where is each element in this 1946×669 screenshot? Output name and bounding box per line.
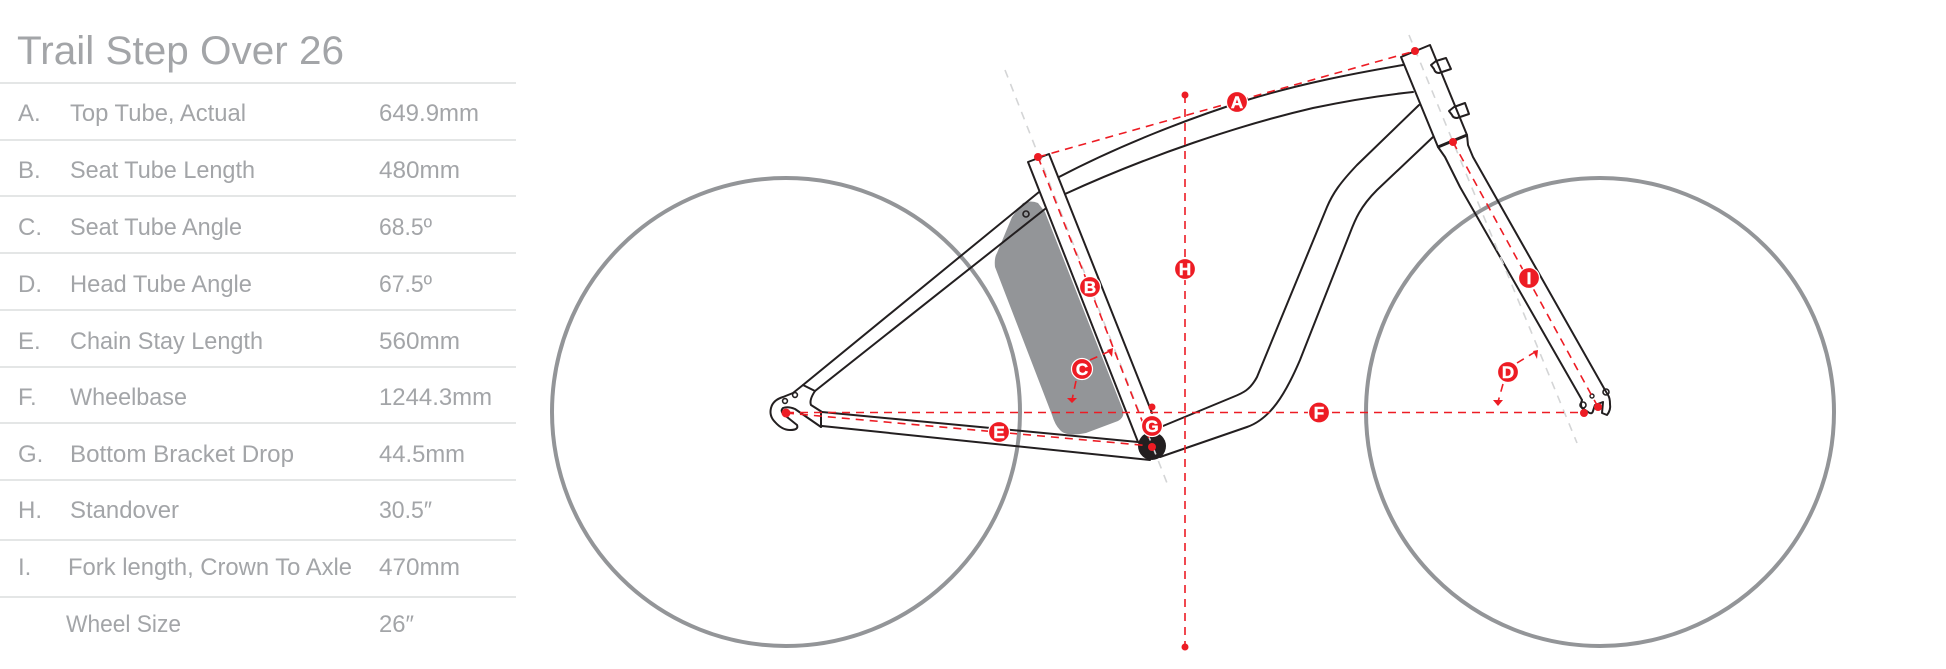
top tube — [1059, 65, 1413, 194]
dropout holes — [783, 393, 797, 403]
row I: Fork length, Crown To Axle — [68, 554, 352, 581]
row E: 560mm — [379, 328, 460, 355]
fork — [1438, 135, 1605, 400]
chain stays — [821, 412, 1150, 460]
row A: A. — [18, 100, 41, 127]
dimension A: top tube: A — [1231, 93, 1243, 112]
head tube lower cup — [1438, 135, 1467, 147]
row C: C. — [18, 214, 42, 241]
fork dropout — [1581, 390, 1610, 415]
head tube — [1401, 45, 1467, 147]
row B: Seat Tube Length — [70, 157, 255, 184]
row C: 68.5º — [379, 214, 432, 241]
row B: B. — [18, 157, 41, 184]
dimension B: seat tube length — [1038, 157, 1152, 446]
dimension G: bottom bracket drop: G — [1145, 417, 1159, 436]
panel: geometry table — [0, 29, 516, 638]
cable clip lower — [1449, 103, 1469, 118]
axle marks — [782, 408, 1588, 418]
front wheel — [1366, 178, 1834, 646]
row E: E. — [18, 328, 41, 355]
row G: 44.5mm — [379, 441, 465, 468]
head tube axis — [1409, 35, 1577, 443]
row H — [18, 497, 432, 524]
row wheel size: 26″ — [379, 611, 414, 638]
row D: D. — [18, 271, 42, 298]
dimension A: top tube — [1034, 47, 1419, 161]
row G: G. — [18, 441, 43, 468]
row E: Chain Stay Length — [70, 328, 263, 355]
title: Trail Step Over 26 — [17, 29, 344, 73]
battery mount hole — [1023, 211, 1029, 217]
row D — [18, 271, 432, 298]
seat tube — [1028, 154, 1152, 442]
dimension H: standover — [1174, 92, 1196, 650]
row H: H. — [18, 497, 42, 524]
dimension C: seat tube angle: C — [1076, 360, 1088, 379]
row F: F. — [18, 384, 37, 411]
row G — [18, 441, 465, 468]
bottom bracket — [1138, 432, 1166, 460]
battery — [995, 202, 1123, 434]
dimension B: seat tube length: B — [1084, 278, 1096, 297]
row G: Bottom Bracket Drop — [70, 441, 294, 468]
row I: 470mm — [379, 554, 460, 581]
dimension F: wheelbase — [786, 402, 1584, 423]
row wheel size: Wheel Size — [66, 611, 181, 638]
row I — [18, 554, 460, 581]
row F — [18, 384, 492, 411]
seat stays — [803, 192, 1045, 391]
rear wheel — [552, 178, 1020, 646]
row F: 1244.3mm — [379, 384, 492, 411]
row F: Wheelbase — [70, 384, 187, 411]
dimension H: standover: H — [1179, 260, 1191, 279]
dimension F: wheelbase: F — [1314, 404, 1324, 422]
row D: 67.5º — [379, 271, 432, 298]
row A — [18, 100, 479, 127]
cable clip upper — [1431, 58, 1451, 73]
dimension C: seat tube angle — [1067, 348, 1113, 403]
down tube — [1160, 105, 1433, 457]
frame — [770, 45, 1610, 460]
row C: Seat Tube Angle — [70, 214, 242, 241]
row B: 480mm — [379, 157, 460, 184]
fork dropout holes — [1580, 389, 1609, 408]
row I: I. — [18, 554, 31, 581]
row A: 649.9mm — [379, 100, 479, 127]
dimension I: fork length — [1449, 138, 1602, 411]
dimension D: head tube angle: D — [1502, 363, 1514, 382]
seat tube axis — [1005, 70, 1167, 483]
row B — [18, 157, 460, 184]
dimension I: fork length: I — [1527, 269, 1531, 288]
dimension E: chain stay: E — [993, 423, 1005, 442]
row E — [18, 328, 460, 355]
dimension G: bottom bracket drop — [1142, 404, 1162, 451]
row D: Head Tube Angle — [70, 271, 252, 298]
row H: 30.5″ — [379, 497, 432, 524]
row C — [18, 214, 432, 241]
rear dropout — [770, 385, 822, 430]
row A: Top Tube, Actual — [70, 100, 246, 127]
dimension E: chain stay — [786, 413, 1152, 446]
bike diagram — [552, 35, 1834, 650]
row H: Standover — [70, 497, 179, 524]
row wheel size — [66, 611, 414, 638]
dimension D: head tube angle — [1493, 350, 1538, 406]
